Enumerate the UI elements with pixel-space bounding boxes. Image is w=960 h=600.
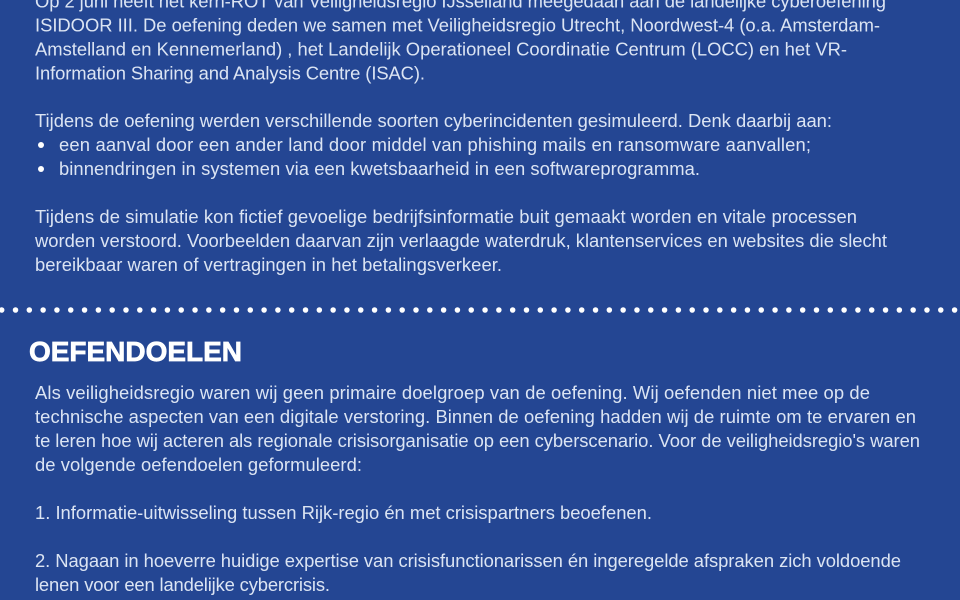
text block: exercise context: [35, 382, 920, 475]
exercise goal 1: 1. Informatie-uitwisseling tussen Rijk-regio én met crisispartners beoefenen.: [35, 502, 652, 523]
text block: introduction: ISIDOOR III. De oefening deden we samen met Veiligheidsregio Utrecht, Noordwest-4 (o.a. Amsterdam-: [35, 14, 880, 36]
bullet list: een aanval door een ander land door middel van phishing mails en ransomware aanvallen;: [59, 134, 811, 155]
dotted section divider: [2, 307, 960, 313]
text block: introduction: Amstelland en Kennemerland) , het Landelijk Operationeel Coordinatie Centrum (LOCC) en het VR-: [35, 38, 847, 60]
text block: simulated incidents: Tijdens de oefening werden verschillende soorten cyberincidenten gesimuleerd. Denk daarbij aan:: [35, 110, 832, 131]
text block: simulation effects: [34, 206, 887, 275]
text block: exercise context: technische aspecten van een digitale verstoring. Binnen de oefening hadden wij de ruimte om te ervaren en: [35, 406, 916, 427]
text block: exercise context: de volgende oefendoelen geformuleerd:: [35, 454, 362, 475]
text block: simulation effects: bereikbaar waren of vertragingen in het betalingsverkeer.: [35, 254, 502, 275]
text block: simulation effects: Tijdens de simulatie kon fictief gevoelige bedrijfsinformatie buit gemaakt worden en vitale processen: [35, 206, 857, 227]
heading: oefendoelen: OEFENDOELEN: [29, 336, 242, 367]
text block: introduction: [35, 0, 886, 84]
text block: exercise context: te leren hoe wij acteren als regionale crisisorganisatie op een cyberscenario. Voor de veiligheidsregio's waren: [35, 430, 920, 451]
exercise goal 2: lenen voor een landelijke cybercrisis.: [35, 574, 330, 595]
text block: simulation effects: worden verstoord. Voorbeelden daarvan zijn verlaagde waterdruk, klantenservices en websites die slecht: [34, 230, 887, 251]
text block: introduction: Information Sharing and Analysis Centre (ISAC).: [35, 62, 425, 84]
text block: exercise context: Als veiligheidsregio waren wij geen primaire doelgroep van de oefening. Wij oefenden niet mee op de: [35, 382, 870, 403]
text block: simulated incidents: [35, 110, 832, 179]
exercise goal 2: 2. Nagaan in hoeverre huidige expertise van crisisfunctionarissen én ingeregelde afspraken zich voldoende: [35, 550, 901, 571]
bullet list: [38, 134, 811, 179]
exercise goal 2: [35, 550, 901, 595]
bullet list: binnendringen in systemen via een kwetsbaarheid in een softwareprogramma.: [59, 158, 700, 179]
